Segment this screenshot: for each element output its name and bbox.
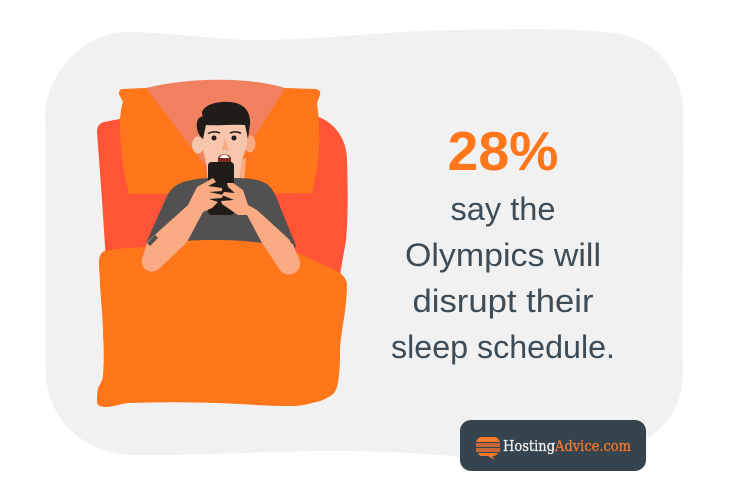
left pillow half (119, 88, 210, 194)
pillow fan of light (146, 80, 285, 165)
logo badge: HostingAdvice.com (460, 420, 646, 471)
illustration: man in bed with phone (97, 80, 348, 407)
left arm and hand (142, 178, 223, 272)
man head (192, 102, 256, 185)
statement text: Olympics will (405, 237, 601, 273)
torso t-shirt (146, 178, 296, 256)
left sleeve cuff (147, 235, 158, 246)
right sleeve cuff (288, 237, 296, 246)
logo wordmark: HostingAdvice.com (503, 437, 631, 455)
right arm and hand (221, 183, 300, 274)
icon: server speech bubble (476, 437, 500, 460)
neck shade (236, 158, 246, 185)
statistic: 28%: 28% (448, 120, 558, 182)
face (203, 120, 247, 185)
blanket (97, 240, 347, 407)
statement text: say the (450, 191, 556, 227)
mouth (218, 154, 231, 164)
statement text: disrupt their (412, 283, 594, 319)
phone (208, 162, 234, 215)
hair (197, 102, 250, 139)
statement text: sleep schedule. (391, 329, 615, 365)
eyebrows (208, 132, 241, 134)
statement text (391, 191, 615, 365)
mattress (97, 116, 348, 275)
left ear (192, 136, 204, 154)
right pillow half (238, 88, 320, 194)
eyes (212, 136, 216, 140)
nose (222, 138, 229, 150)
right ear (244, 136, 256, 152)
panel: background blob (45, 29, 683, 459)
